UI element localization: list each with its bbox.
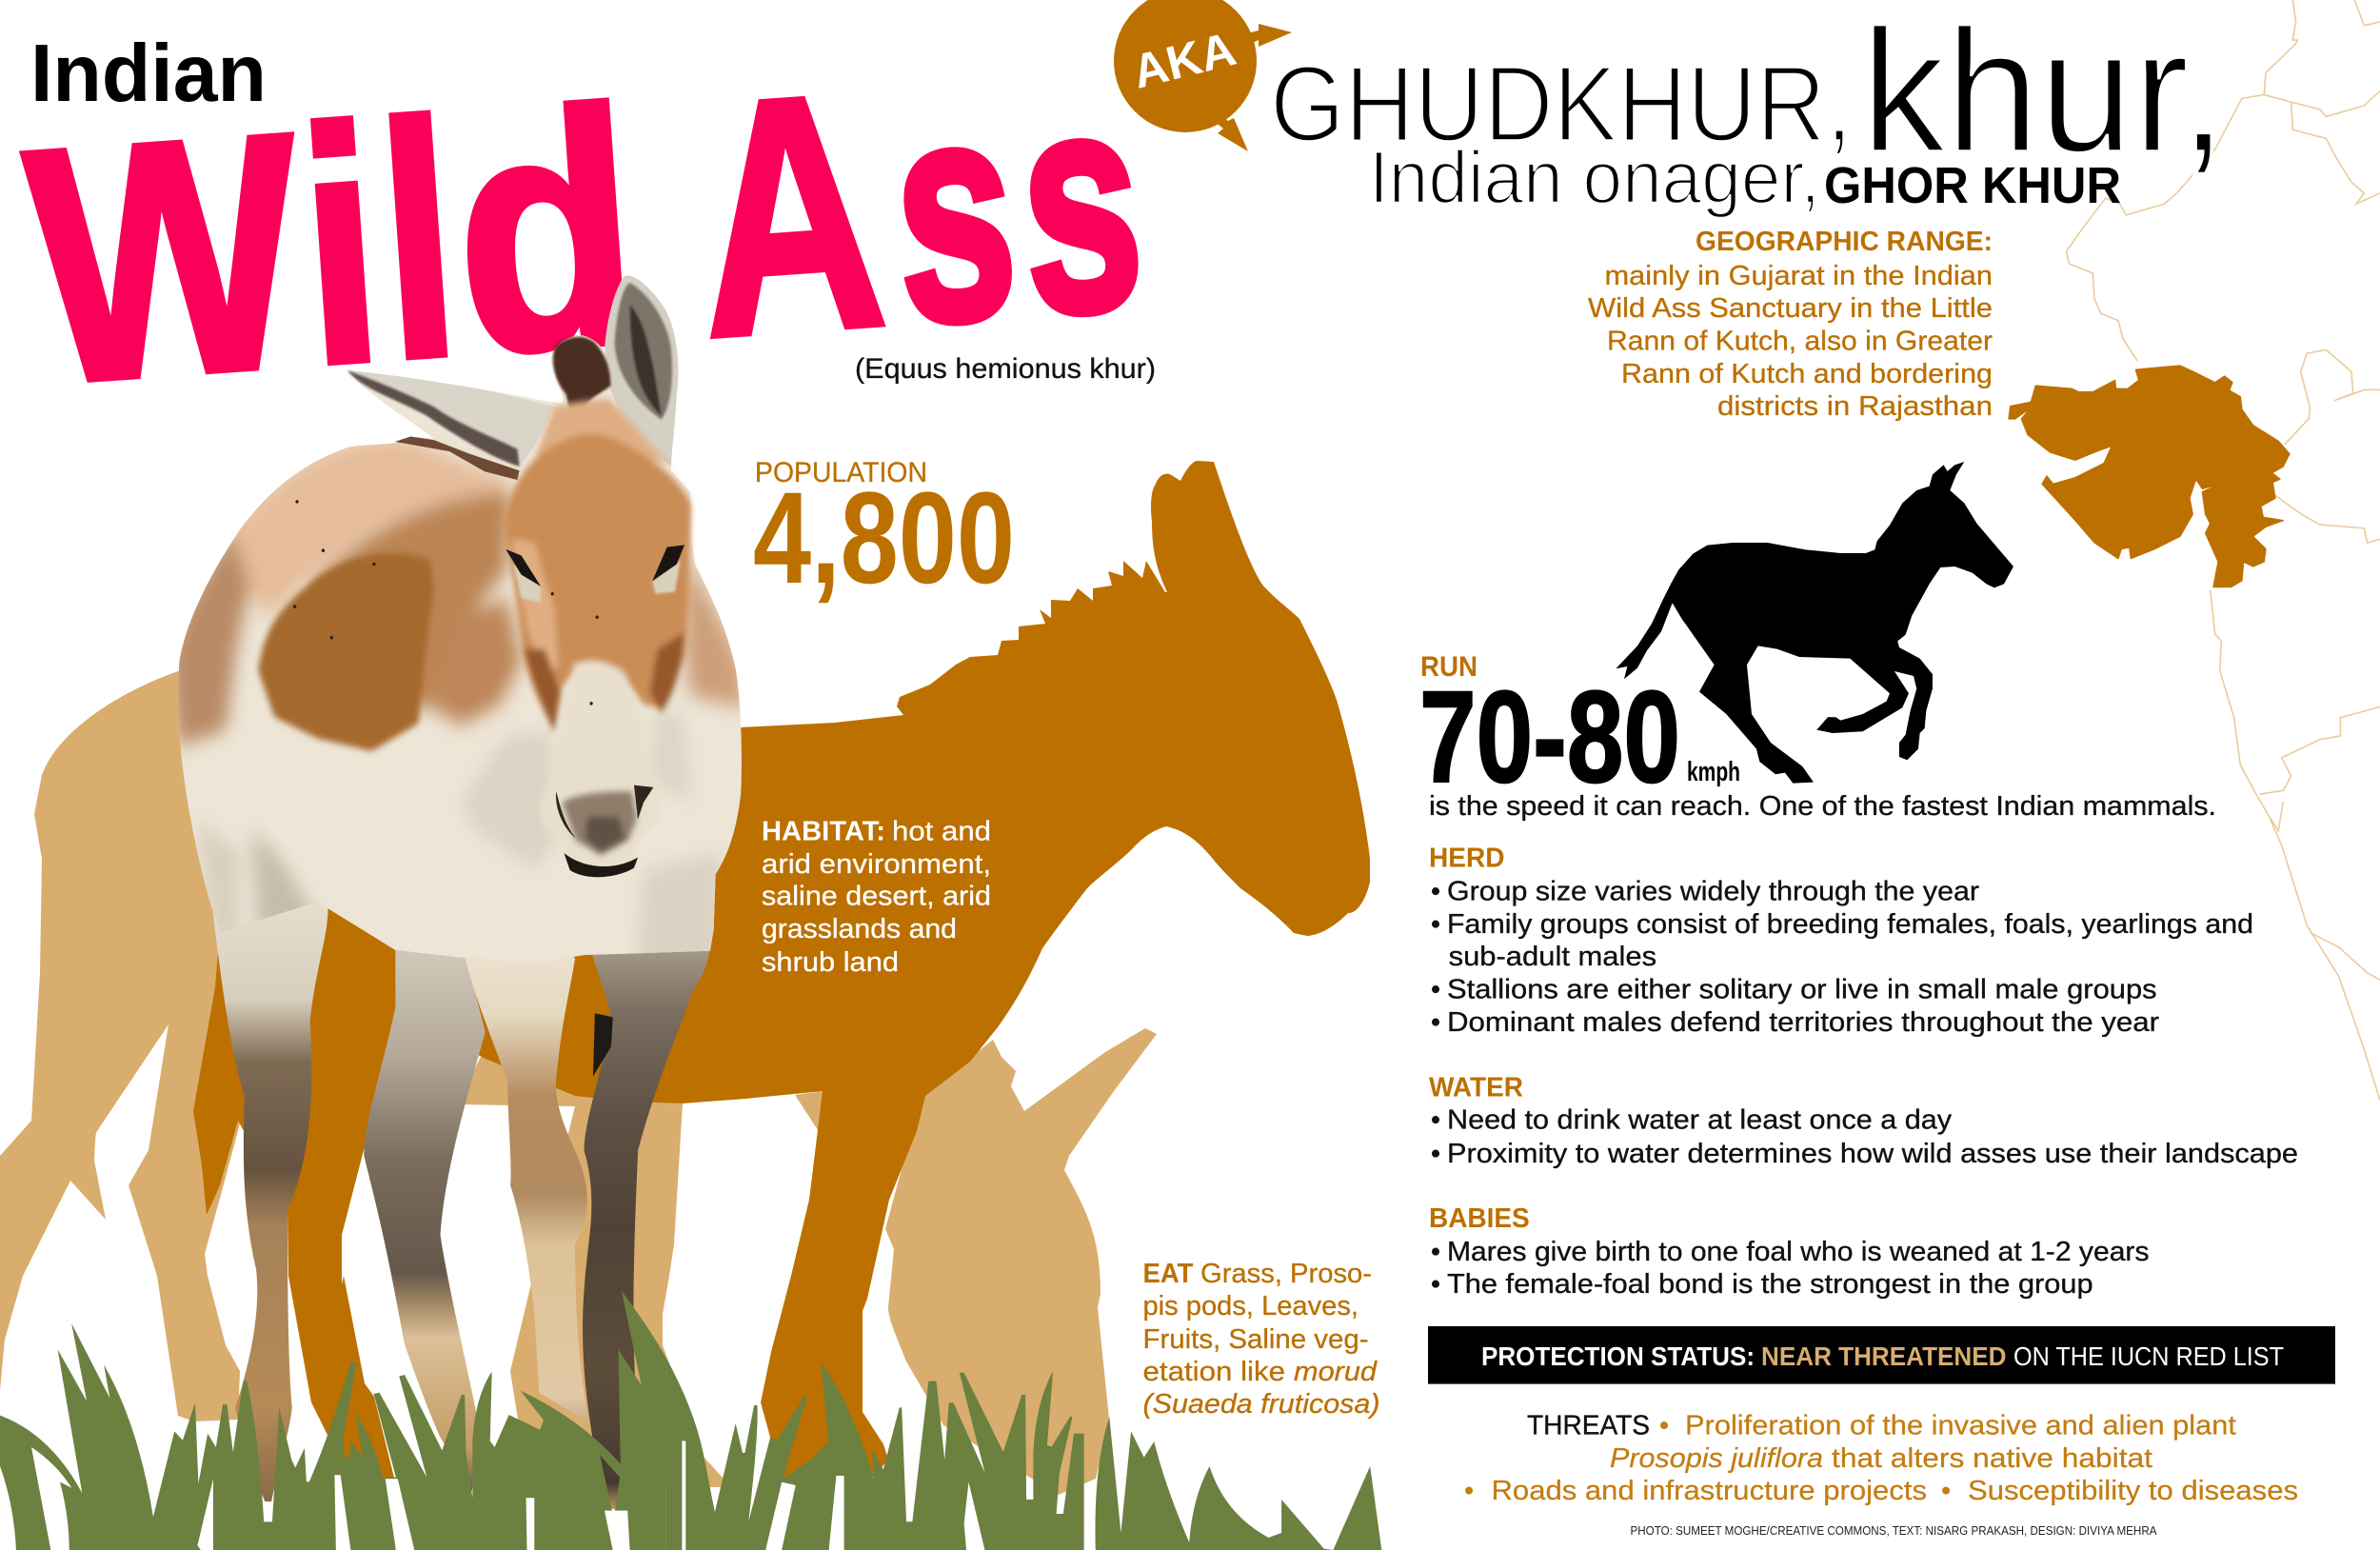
- herd section: Group size varies widely through the year: [1447, 877, 1980, 907]
- water section: WATER: [1429, 1072, 1523, 1103]
- herd section: •: [1431, 975, 1440, 1005]
- threats text: Susceptibility to diseases: [1968, 1476, 2298, 1506]
- eat text: EAT: [1142, 1259, 1194, 1289]
- eat text: etation like: [1142, 1357, 1285, 1387]
- protection status bar: [1428, 1326, 2335, 1384]
- map: Gujarat: [2009, 366, 2290, 587]
- threats text: THREATS: [1527, 1411, 1650, 1441]
- run speed stat: [1419, 651, 2216, 822]
- icon: running wild ass: [1616, 462, 2013, 784]
- legs: [202, 874, 710, 1511]
- grass gaps: [197, 1441, 984, 1550]
- title: Wild Ass: s: [1010, 26, 1151, 379]
- photo: wild ass: [169, 275, 744, 1511]
- geographic range text: Rann of Kutch and bordering: [1621, 359, 1993, 389]
- title: Wild Ass: l: [369, 53, 468, 429]
- left ear: [347, 370, 554, 467]
- geographic range text: districts in Rajasthan: [1717, 391, 1993, 422]
- geographic range text: Wild Ass Sanctuary in the Little: [1588, 293, 1993, 324]
- title: Wild Ass: i: [290, 57, 391, 434]
- population stat: POPULATION: [755, 457, 927, 488]
- population stat: 4,800: [753, 466, 1015, 611]
- map outline of India: [2067, 0, 2380, 1101]
- geographic range text: [1588, 227, 1993, 422]
- title: Wild Ass: s: [884, 34, 1025, 388]
- run speed stat: RUN: [1420, 651, 1478, 683]
- babies section: BABIES: [1429, 1203, 1530, 1234]
- AKA badge: [1114, 0, 1292, 151]
- eat text: (Suaeda fruticosa): [1142, 1389, 1380, 1420]
- hide specks: [293, 500, 599, 705]
- eat text: [1142, 1259, 1380, 1420]
- threats text: Proliferation of the invasive and alien plant: [1685, 1411, 2236, 1441]
- babies section: Mares give birth to one foal who is weaned at 1-2 years: [1447, 1237, 2150, 1267]
- other names heading: GHUDKHUR,: [1270, 44, 1853, 164]
- herd section: •: [1431, 877, 1440, 907]
- title: Indian: Indian: [30, 29, 267, 119]
- other names heading: Indian onager,: [1369, 135, 1820, 219]
- run speed stat: is the speed it can reach. One of the fastest Indian mammals.: [1429, 791, 2216, 822]
- badge label: AKA: [1127, 22, 1240, 99]
- herd section: sub-adult males: [1449, 942, 1656, 972]
- muzzle: [538, 661, 659, 877]
- threats text: [1464, 1411, 2298, 1506]
- herd section: Stallions are either solitary or live in small male groups: [1447, 975, 2157, 1005]
- protection status bar: ON THE IUCN RED LIST: [2013, 1341, 2284, 1371]
- herd section: [1429, 844, 2253, 1038]
- threats text: •: [1659, 1411, 1669, 1441]
- water section: •: [1431, 1105, 1440, 1136]
- geographic range text: GEOGRAPHIC RANGE:: [1696, 227, 1993, 257]
- habitat text: arid environment,: [762, 849, 991, 880]
- other names heading: [1270, 0, 2227, 219]
- habitat text: HABITAT:: [762, 817, 885, 847]
- body, head and ears: [169, 275, 744, 968]
- water section: [1429, 1072, 2298, 1169]
- right ear: [605, 275, 678, 467]
- habitat text: [762, 817, 991, 978]
- title: Wild Ass: W: [17, 64, 315, 454]
- arrow: upper: [1247, 24, 1292, 47]
- eat text: morud: [1294, 1357, 1378, 1387]
- grass: [0, 1291, 1381, 1550]
- herd section: Family groups consist of breeding females, foals, yearlings and: [1447, 909, 2253, 940]
- herd section: Dominant males defend territories throughout the year: [1447, 1007, 2160, 1038]
- title: Wild Ass: [17, 4, 1152, 454]
- herd section: •: [1431, 1007, 1440, 1038]
- herd section: HERD: [1429, 844, 1504, 874]
- geographic range text: mainly in Gujarat in the Indian: [1605, 261, 1993, 291]
- eat text: Fruits, Saline veg-: [1142, 1324, 1369, 1355]
- threats text: •: [1941, 1476, 1951, 1506]
- threats text: •: [1464, 1476, 1474, 1506]
- water section: Need to drink water at least once a day: [1447, 1105, 1953, 1136]
- eyes: [513, 564, 541, 603]
- threats text: Roads and infrastructure projects: [1491, 1476, 1927, 1506]
- run speed stat: 70-80: [1419, 665, 1680, 810]
- arrow: lower: [1215, 114, 1248, 151]
- credits: PHOTO: SUMEET MOGHE/CREATIVE COMMONS, TEXT: NISARG PRAKASH, DESIGN: DIVIYA MEHRA: [1630, 1523, 2157, 1538]
- eat text: Grass, Proso-: [1200, 1259, 1372, 1289]
- silhouette: light donkey: [0, 666, 1157, 1495]
- habitat text: grasslands and: [762, 914, 957, 944]
- mane: [395, 437, 520, 480]
- scientific name: (Equus hemionus khur): [855, 353, 1156, 385]
- geographic range text: Rann of Kutch, also in Greater: [1607, 326, 1993, 356]
- water section: Proximity to water determines how wild asses use their landscape: [1447, 1139, 2298, 1169]
- babies section: The female-foal bond is the strongest in the group: [1447, 1269, 2093, 1300]
- protection status bar: NEAR THREATENED: [1761, 1341, 2007, 1371]
- run speed stat: kmph: [1687, 757, 1740, 787]
- protection status bar: PROTECTION STATUS:: [1481, 1341, 1755, 1371]
- silhouette: dark donkey: [193, 461, 1370, 1488]
- water section: •: [1431, 1139, 1440, 1169]
- eat text: pis pods, Leaves,: [1142, 1291, 1359, 1321]
- other names heading: GHOR KHUR: [1824, 157, 2121, 214]
- threats text: that alters native habitat: [1832, 1443, 2152, 1474]
- babies section: •: [1431, 1269, 1440, 1300]
- habitat text: hot and: [892, 817, 991, 847]
- babies section: •: [1431, 1237, 1440, 1267]
- babies section: [1429, 1203, 2150, 1300]
- habitat text: saline desert, arid: [762, 882, 991, 912]
- title: Wild Ass: d: [444, 40, 648, 424]
- title: Wild Ass: A: [686, 22, 894, 407]
- habitat text: shrub land: [762, 947, 899, 978]
- head: [504, 398, 691, 732]
- threats text: Prosopis juliflora: [1610, 1443, 1823, 1474]
- herd section: •: [1431, 909, 1440, 940]
- forelock: [553, 337, 610, 415]
